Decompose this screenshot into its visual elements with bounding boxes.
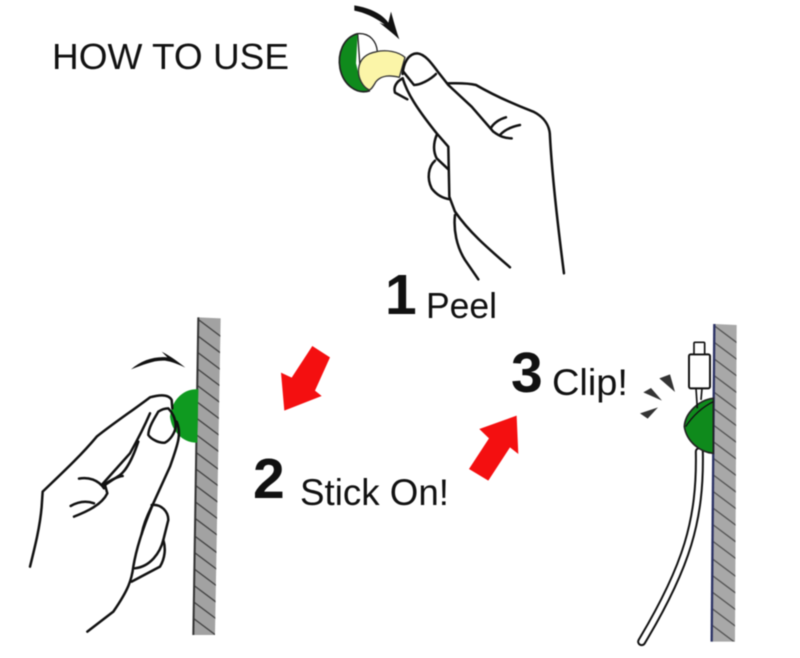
red arrow: step 1 to step 2 <box>281 346 330 411</box>
step 1 number: 1 <box>385 263 417 327</box>
hand outline <box>30 395 179 632</box>
step 3 number: 3 <box>511 341 543 405</box>
title: HOW TO USE <box>52 36 289 77</box>
hand outline <box>395 53 564 279</box>
wall <box>712 324 740 645</box>
step 1 label: Peel <box>426 285 497 326</box>
step 1 illustration: hand peeling clip <box>339 5 564 279</box>
clip slot line <box>686 402 713 427</box>
icon: curved arrow <box>131 352 185 369</box>
step 2 label: Stick On! <box>300 472 449 513</box>
icon: clip being peeled <box>339 34 405 92</box>
icon: curved arrow <box>354 5 399 39</box>
red arrow: step 2 to step 3 <box>469 416 518 481</box>
step 2 illustration: hand sticking clip on wall <box>30 317 223 638</box>
wall <box>193 317 223 638</box>
step 3 label: Clip! <box>552 362 628 403</box>
icon: click marks <box>640 374 675 419</box>
cable connector <box>689 342 710 408</box>
icon: green clip <box>684 398 713 453</box>
icon: green clip <box>170 389 198 443</box>
cable <box>642 452 699 642</box>
step 3 illustration: cable clipped on wall <box>640 324 740 645</box>
step 2 number: 2 <box>253 447 285 511</box>
